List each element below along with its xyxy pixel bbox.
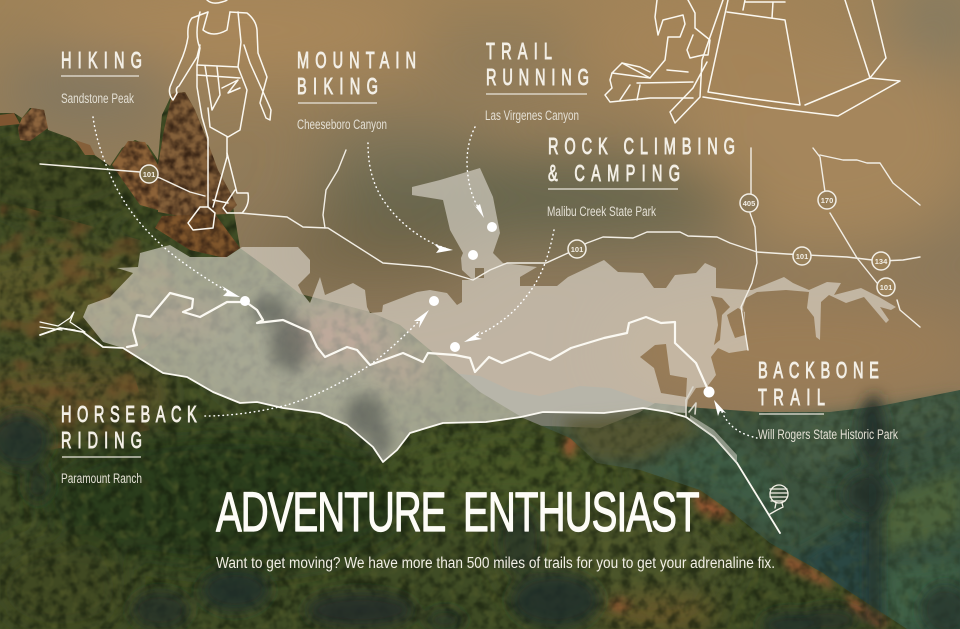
backbone trail and coastline [40, 293, 780, 533]
label: rock climbing and camping: & CAMPING [548, 161, 680, 187]
label: mountain biking: MOUNTAIN [297, 48, 416, 74]
title: ADVENTURE [216, 481, 446, 544]
label: mountain biking: Cheeseboro Canyon [297, 117, 387, 132]
label: backbone trail: BACKBONE [758, 358, 879, 384]
icon: hand at trail end [770, 485, 788, 514]
road lines [40, 148, 920, 350]
highway shields: 101 [571, 245, 583, 254]
panel: park map shape [83, 168, 896, 462]
label: hiking: Sandstone Peak [61, 91, 134, 106]
label: trail running: Las Virgenes Canyon [485, 108, 579, 123]
label: hiking [61, 48, 142, 106]
highways [40, 148, 920, 350]
dotted leader lines with arrows [93, 117, 757, 438]
label: trail running: TRAIL [486, 39, 552, 65]
location markers [240, 222, 714, 398]
label: horseback riding [61, 402, 197, 486]
blurred foreground plants [0, 395, 960, 629]
highway shields: 170 [821, 196, 833, 205]
label: rock climbing and camping [547, 134, 735, 219]
highway shields: 134 [875, 257, 888, 266]
label: trail running [485, 39, 589, 123]
label: horseback riding: RIDING [61, 428, 142, 454]
label: trail running: RUNNING [486, 65, 589, 91]
label: horseback riding: HORSEBACK [61, 402, 197, 428]
rust patches on upper left slope [0, 200, 200, 460]
rocks [0, 92, 240, 258]
highway shields [140, 165, 895, 296]
label: rock climbing and camping: ROCK CLIMBING [548, 134, 735, 160]
highway shields: 101 [143, 170, 155, 179]
smoke shadows over map [252, 296, 392, 454]
subtitle: Want to get moving? We have more than 500 miles of trails for you to get your adrenaline fix. [216, 555, 775, 572]
highway shields: 101 [796, 252, 808, 261]
label: backbone trail: Will Rogers State Historic Park [758, 427, 898, 442]
highway shields: 101 [880, 283, 892, 292]
label: horseback riding: Paramount Ranch [61, 471, 142, 486]
sky [0, 0, 960, 392]
title: ENTHUSIAST [463, 481, 700, 544]
hiker line drawing [169, 0, 271, 230]
label: rock climbing and camping: Malibu Creek State Park [547, 204, 656, 219]
label: mountain biking [297, 48, 416, 132]
hillside speckle [0, 94, 899, 629]
label: hiking: HIKING [61, 48, 142, 74]
title [216, 481, 700, 544]
camper and tent line drawing [605, 0, 900, 123]
highway shields: 405 [743, 199, 755, 208]
hazy distant mountains [460, 374, 654, 427]
teal valley hills [520, 390, 960, 629]
label: backbone trail [758, 358, 898, 442]
label: backbone trail: TRAIL [758, 385, 825, 411]
label: mountain biking: BIKING [297, 74, 378, 100]
